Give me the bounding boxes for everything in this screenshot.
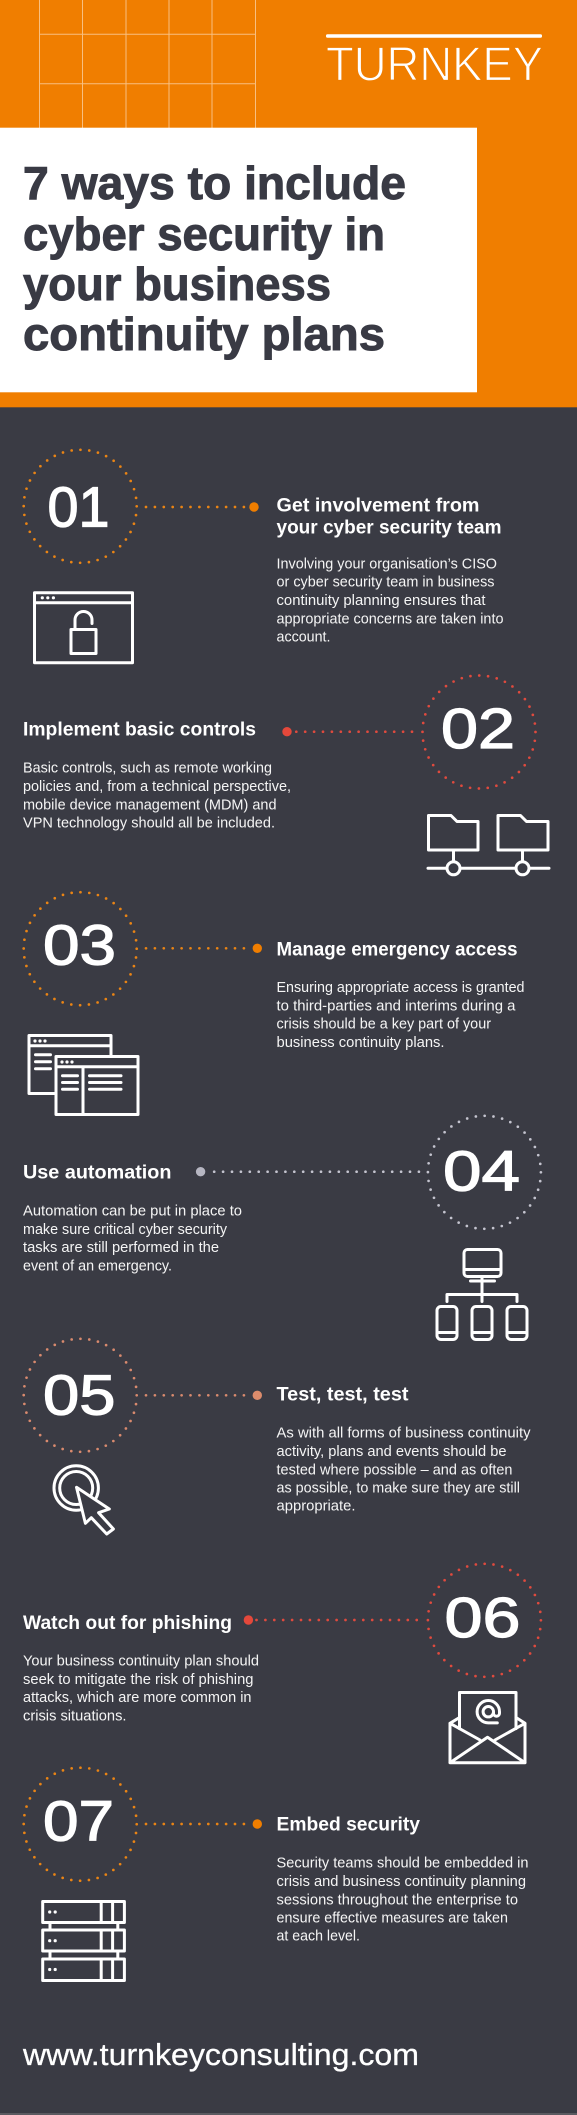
title panel: cyber security in (23, 208, 385, 260)
body text 01 (276, 556, 504, 645)
connector 02 (282, 727, 414, 736)
number badge 04 (428, 1116, 541, 1229)
footer website address: www.turnkeyconsulting.com (22, 2037, 419, 2072)
connector 01 (146, 502, 259, 512)
body text 04: tasks are still performed in the (23, 1240, 219, 1256)
heading 01 (276, 495, 502, 538)
body text 02: mobile device management (MDM) and (23, 797, 276, 813)
body text 04: make sure critical cyber security (23, 1222, 228, 1238)
body text 05: As with all forms of business continuity (276, 1426, 531, 1442)
body text 07 (276, 1856, 528, 1945)
number badge 05: 05 (43, 1364, 116, 1428)
step 02 panel (23, 676, 549, 875)
number badge 06 (428, 1564, 541, 1677)
heading 02: Implement basic controls (23, 719, 256, 741)
body text 07: ensure effective measures are taken (276, 1910, 508, 1926)
body text 02: VPN technology should all be included. (23, 816, 275, 832)
body text 03: business continuity plans. (276, 1035, 444, 1051)
step 07 panel (24, 1768, 528, 1980)
connector 05 (146, 1391, 262, 1400)
icon: overlapping application windows (29, 1036, 138, 1114)
body text 06: seek to mitigate the risk of phishing (23, 1672, 254, 1688)
body text 06: attacks, which are more common in (23, 1690, 252, 1706)
number badge 02: 02 (441, 697, 515, 761)
body text 06: crisis situations. (23, 1708, 126, 1724)
number badge 04: 04 (443, 1139, 520, 1203)
body text 07: at each level. (276, 1929, 360, 1945)
number badge 01 (24, 450, 137, 563)
connector 06 (244, 1615, 421, 1625)
body text 02: policies and, from a technical perspective, (23, 779, 291, 795)
number badge 07: 07 (43, 1790, 114, 1854)
body text 01: account. (276, 629, 330, 645)
title panel: your business (23, 258, 331, 310)
body text 07: crisis and business continuity planning (276, 1874, 526, 1890)
title panel (0, 128, 477, 392)
logo: Turnkey: TURNKEY (326, 39, 543, 92)
step 04 panel (23, 1116, 541, 1340)
body text 06 (23, 1654, 259, 1724)
heading 03: Manage emergency access (276, 938, 518, 960)
body text 02 (23, 761, 291, 832)
icon: networked folders (428, 816, 549, 875)
number badge 01: 01 (48, 476, 110, 540)
body text 03: crisis should be a key part of your (276, 1017, 491, 1033)
body text 02: Basic controls, such as remote working (23, 761, 272, 777)
body text 03: Ensuring appropriate access is granted (276, 980, 524, 996)
heading 01: Get involvement from (276, 495, 480, 517)
step 05 panel (24, 1339, 531, 1534)
icon: browser window with padlock (34, 593, 132, 663)
step 03 panel (24, 892, 524, 1114)
step 06 panel (23, 1564, 541, 1763)
body text 04 (23, 1204, 242, 1274)
number badge 03: 03 (43, 914, 116, 978)
body text 05: appropriate. (276, 1499, 356, 1515)
connector 04 (196, 1167, 421, 1176)
icon: open envelope with at sign (450, 1692, 525, 1763)
body text 05: activity, plans and events should be (276, 1444, 506, 1460)
heading 05: Test, test, test (276, 1384, 409, 1406)
body text 05: as possible, to make sure they are still (276, 1481, 520, 1497)
body text 04: Automation can be put in place to (23, 1204, 242, 1220)
body text 04: event of an emergency. (23, 1258, 172, 1274)
title panel: continuity plans (23, 308, 385, 360)
step 01 panel (24, 450, 503, 663)
body text 03 (276, 980, 524, 1051)
connector 07 (146, 1819, 262, 1829)
heading 06: Watch out for phishing (23, 1612, 232, 1634)
number badge 06: 06 (444, 1586, 520, 1650)
heading 01: your cyber security team (276, 516, 502, 538)
header: orange banner (0, 0, 577, 407)
body text 07: Security teams should be embedded in (276, 1856, 528, 1872)
body text 01: or cyber security team in business (276, 575, 494, 591)
body text 03: to third-parties and interims during a (276, 998, 516, 1014)
body text 05 (276, 1426, 531, 1515)
title panel: 7 ways to include (23, 157, 406, 209)
body text 01: Involving your organisation’s CISO (276, 556, 497, 572)
icon: computer network hierarchy (437, 1250, 527, 1340)
body text 06: Your business continuity plan should (23, 1654, 259, 1670)
number badge 07 (24, 1768, 137, 1881)
body text 01: appropriate concerns are taken into (276, 611, 504, 627)
body text 01: continuity planning ensures that (276, 593, 486, 609)
icon: cursor clicking target (54, 1466, 113, 1534)
number badge 03 (24, 892, 137, 1005)
connector 03 (146, 944, 262, 953)
heading 04: Use automation (23, 1162, 172, 1184)
number badge 05 (24, 1339, 137, 1452)
body text 05: tested where possible – and as often (276, 1462, 512, 1478)
icon: server rack (43, 1902, 124, 1980)
heading 07: Embed security (276, 1814, 420, 1836)
number badge 02 (422, 676, 536, 788)
body text 07: sessions throughout the enterprise to (276, 1892, 518, 1908)
